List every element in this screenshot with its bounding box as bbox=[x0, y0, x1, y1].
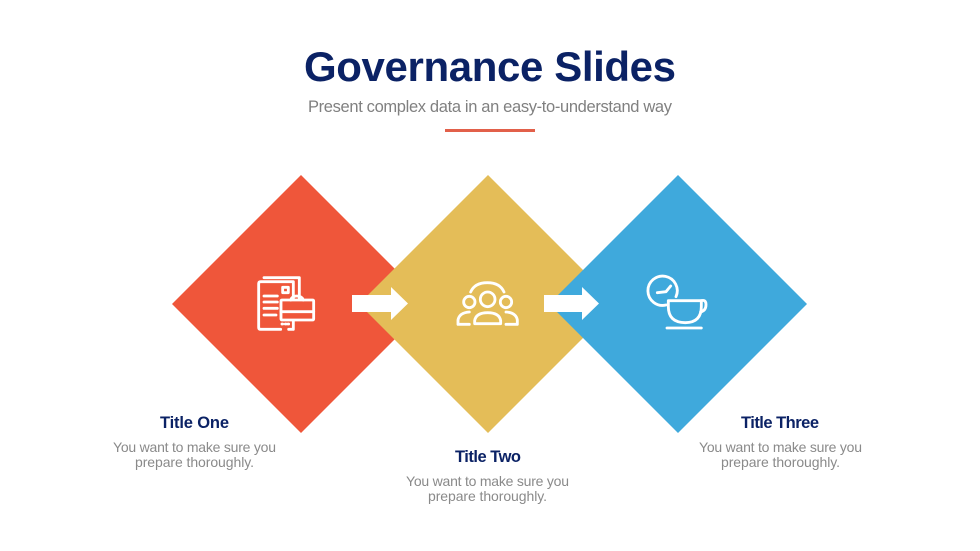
description: prepare thoroughly. bbox=[721, 454, 840, 470]
caption: title three bbox=[699, 414, 862, 470]
icon: group of people bbox=[458, 283, 517, 324]
heading: Title Two bbox=[455, 448, 521, 466]
description: You want to make sure you bbox=[406, 473, 569, 489]
arrow: red to yellow bbox=[352, 287, 408, 320]
icon: clock and cup bbox=[648, 276, 706, 328]
caption: title one bbox=[113, 414, 276, 470]
heading: Title One bbox=[160, 414, 229, 432]
subtitle: Present complex data in an easy-to-understand way bbox=[308, 98, 673, 116]
description: prepare thoroughly. bbox=[135, 454, 254, 470]
diamond: red bbox=[172, 175, 430, 433]
description: You want to make sure you bbox=[113, 439, 276, 455]
arrow: yellow to blue bbox=[544, 287, 599, 320]
diamond: blue bbox=[549, 175, 807, 433]
diamond: yellow bbox=[359, 175, 617, 433]
description: prepare thoroughly. bbox=[428, 488, 547, 504]
title: Governance Slides bbox=[304, 43, 676, 90]
heading: Title Three bbox=[741, 414, 819, 432]
caption: title two bbox=[406, 448, 569, 504]
description: You want to make sure you bbox=[699, 439, 862, 455]
title underline bbox=[445, 129, 535, 132]
icon: document and briefcase bbox=[259, 278, 314, 329]
